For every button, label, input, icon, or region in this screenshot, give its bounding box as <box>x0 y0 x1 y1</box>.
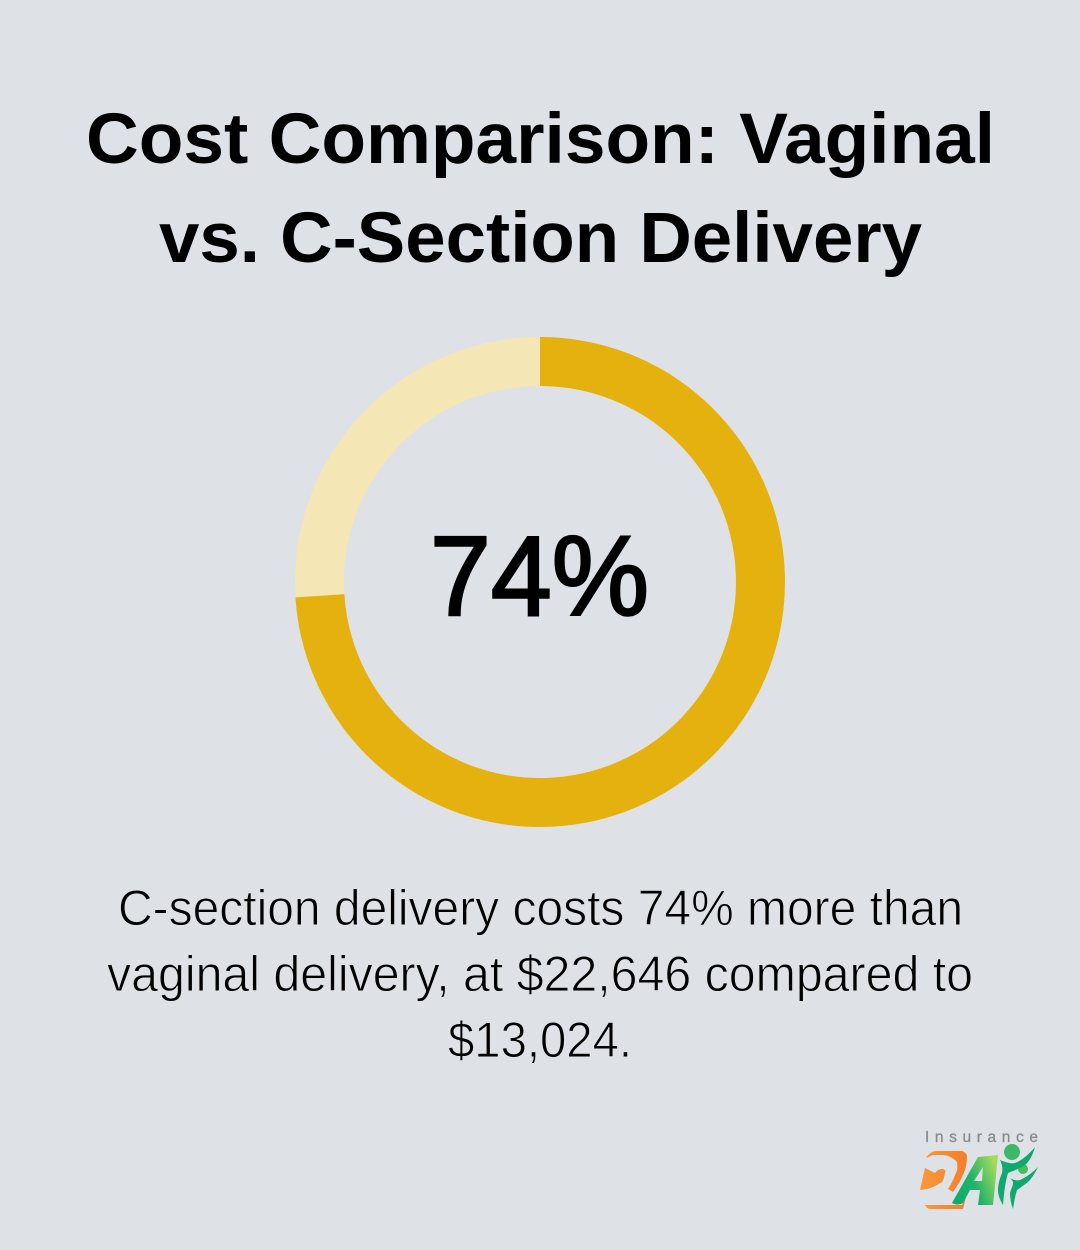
description text: C-section delivery costs 74% more than <box>118 880 963 936</box>
donut value: 74% <box>430 513 649 639</box>
icon: orange 2 with heart <box>920 1151 967 1209</box>
description text <box>107 880 973 1068</box>
title: Cost Comparison: Vaginal <box>86 100 995 179</box>
title <box>86 100 995 278</box>
description text: $13,024. <box>448 1012 632 1068</box>
description text: vaginal delivery, at $22,646 compared to <box>107 946 973 1002</box>
logo: Insurance 2All: Insurance <box>925 1129 1038 1146</box>
donut chart: 74% <box>320 362 760 803</box>
title: vs. C-Section Delivery <box>159 199 923 278</box>
icon: green A <box>952 1155 998 1205</box>
logo: Insurance 2All <box>920 1129 1038 1209</box>
icon: two figures <box>998 1144 1038 1209</box>
